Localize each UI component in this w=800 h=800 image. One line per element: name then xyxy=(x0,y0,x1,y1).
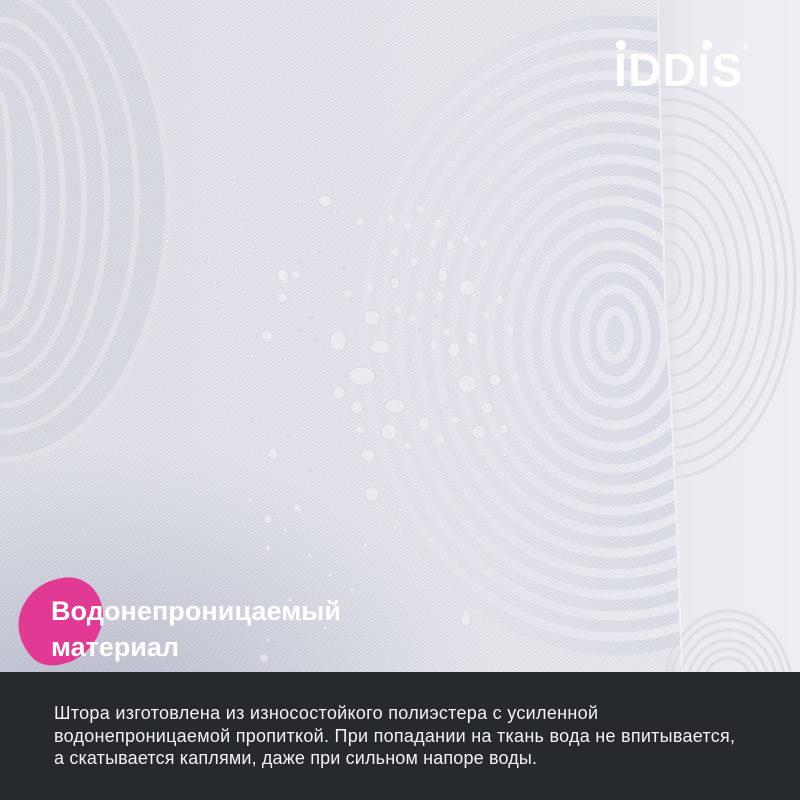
concentric rings: left pattern xyxy=(162,175,165,240)
spiral rings on the front fold xyxy=(612,16,680,655)
iddis logo xyxy=(614,40,750,96)
curtain fold highlight xyxy=(658,0,682,672)
description text: водонепроницаемой пропиткой. При попадании на ткань вода не впитывается, xyxy=(54,726,735,746)
heading: Водонепроницаемый xyxy=(51,596,341,626)
description text: а скатывается каплями, даже при сильном напоре воды. xyxy=(54,748,537,768)
description text: Штора изготовлена из износостойкого полиэстера с усиленной xyxy=(54,703,598,723)
heading: материал xyxy=(51,632,179,662)
small droplets: shadow xyxy=(167,178,546,510)
scattered lower droplets xyxy=(250,500,430,640)
spiral rings behind the fold xyxy=(670,86,796,479)
logo dots xyxy=(616,40,712,50)
registered mark: ® xyxy=(742,42,750,53)
pink blob accent xyxy=(19,577,103,665)
water drops xyxy=(167,178,546,662)
small droplets: sparkle xyxy=(167,178,546,510)
medium droplets: body xyxy=(270,201,516,446)
bottom description panel xyxy=(0,672,800,800)
fabric weave texture xyxy=(0,0,682,672)
large droplets xyxy=(260,195,501,662)
logo wordmark: IDDIS xyxy=(614,44,742,96)
concentric rings: bottom-right pattern xyxy=(674,610,792,672)
